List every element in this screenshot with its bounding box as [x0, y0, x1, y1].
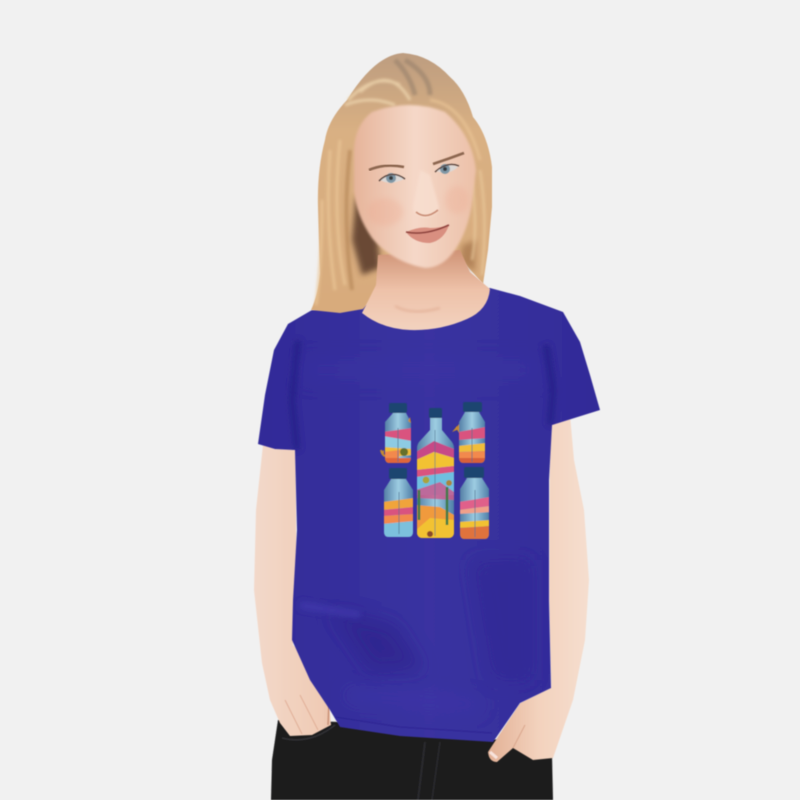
face — [354, 105, 476, 268]
shirt shading — [292, 340, 553, 705]
hair strands — [316, 60, 485, 305]
left eyebrow — [369, 166, 404, 170]
cheek blush — [367, 198, 403, 226]
jeans — [271, 720, 553, 800]
left arm and hand — [254, 445, 367, 736]
hair shadow by neck — [352, 195, 380, 275]
hair — [311, 53, 492, 313]
mouth — [406, 225, 449, 243]
bottle print — [381, 402, 490, 540]
t-shirt — [258, 288, 600, 742]
bottle: bottom right — [459, 467, 490, 540]
neck and chest — [362, 250, 490, 330]
right eye — [435, 164, 459, 174]
bottle: center — [416, 408, 459, 540]
bottle: top left — [381, 403, 412, 465]
left eye — [379, 173, 405, 183]
bottle: top right — [456, 402, 486, 465]
right eyebrow — [433, 153, 464, 164]
nose — [413, 170, 439, 217]
product photo: woman wearing t-shirt — [254, 52, 601, 800]
right arm and hand — [488, 415, 589, 762]
hem stitch — [335, 717, 492, 733]
bottle: bottom left — [383, 468, 414, 538]
